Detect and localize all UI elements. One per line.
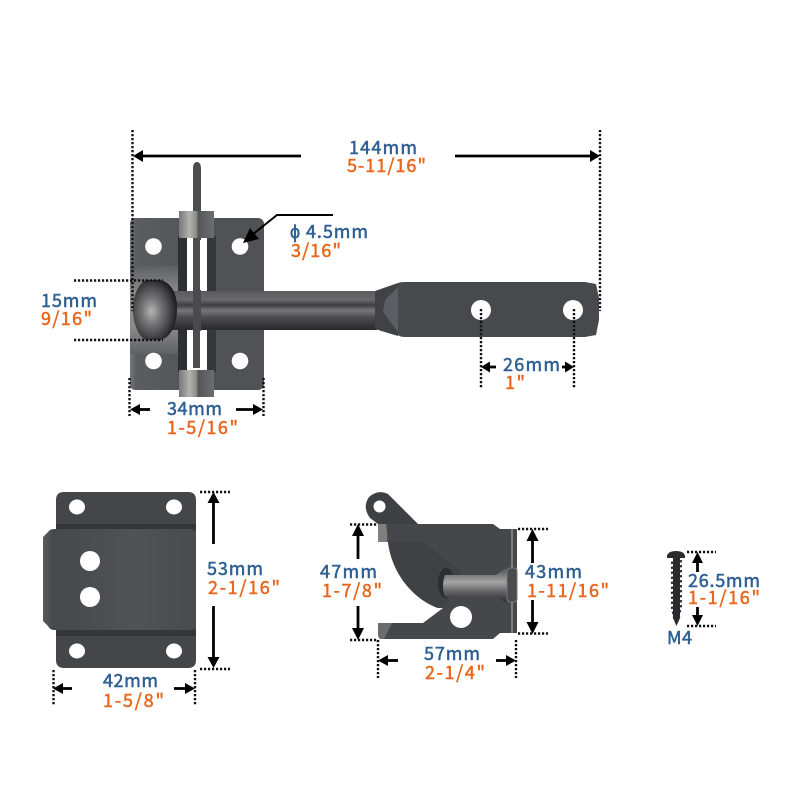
dimension: height 47mm: 1-7/8" — [322, 577, 382, 603]
dimension: screw length 26.5mm — [687, 552, 760, 626]
screw illustration — [667, 551, 685, 626]
top hinge cap — [179, 211, 214, 238]
panel: strike plate with dimensions — [43, 492, 280, 713]
dimension: width 57mm: 2-1/4" — [425, 659, 485, 685]
dimension: overall length 144mm: 5-11/16" — [347, 152, 426, 178]
dimension: hole spacing 26mm: 1" — [505, 369, 525, 395]
dimension: width 42mm — [53, 667, 195, 713]
screw size label M4: M4 — [667, 624, 692, 650]
bottom hinge cap — [179, 370, 214, 397]
central channel with slots — [178, 236, 216, 372]
vertical fin with rounded top — [193, 162, 201, 368]
dimension: screw length 26.5mm: 1-1/16" — [688, 584, 760, 610]
dimension: height 47mm: 47mm — [320, 558, 377, 584]
dimension: width 57mm: 57mm — [424, 640, 480, 666]
dimension: plate width 34mm: 34mm — [167, 395, 222, 421]
latch product illustration — [130, 162, 599, 397]
dimension: knob 15mm: 9/16" — [41, 305, 92, 331]
dimension: overall length 144mm — [132, 130, 600, 311]
dimension: height 43mm — [518, 529, 609, 634]
panel: assembled latch with dimensions — [41, 130, 600, 440]
mounting plate — [130, 218, 264, 390]
dimension: height 53mm: 53mm — [207, 555, 263, 581]
dimension: overall length 144mm: 144mm — [349, 134, 417, 160]
dimension: height 53mm — [200, 492, 280, 669]
dimension: plate width 34mm: 1-5/16" — [167, 414, 238, 440]
dimension: height 43mm: 1-11/16" — [527, 577, 609, 603]
dimension: hole diameter 4.5mm: ϕ 4.5mm — [290, 218, 368, 244]
dimension: knob 15mm: 15mm — [41, 287, 97, 313]
dimension: hole spacing 26mm: 26mm — [503, 351, 560, 377]
bolt shaft and flat end — [172, 282, 599, 337]
strike plate illustration — [43, 492, 196, 668]
dimension: width 42mm: 42mm — [103, 667, 158, 693]
panel: screw with dimensions — [667, 551, 760, 650]
fin over shaft — [193, 290, 201, 331]
catch illustration — [366, 492, 517, 639]
dimension: width 57mm — [378, 640, 516, 685]
dimension: plate width 34mm — [130, 378, 264, 440]
panel: gravity latch catch with dimensions — [320, 492, 609, 685]
dimension: width 42mm: 1-5/8" — [103, 687, 164, 713]
dimension: hole diameter 4.5mm — [243, 215, 368, 263]
dimension: hole spacing 26mm — [481, 309, 574, 395]
dimension: height 43mm: 43mm — [525, 558, 582, 584]
dimension: hole diameter 4.5mm: 3/16" — [291, 237, 341, 263]
dimension: height 47mm — [320, 524, 382, 640]
dimension: screw length 26.5mm: 26.5mm — [688, 567, 760, 593]
dimension: height 53mm: 2-1/16" — [208, 574, 280, 600]
dimension: knob 15mm — [41, 280, 163, 340]
bolt knob — [133, 280, 177, 340]
